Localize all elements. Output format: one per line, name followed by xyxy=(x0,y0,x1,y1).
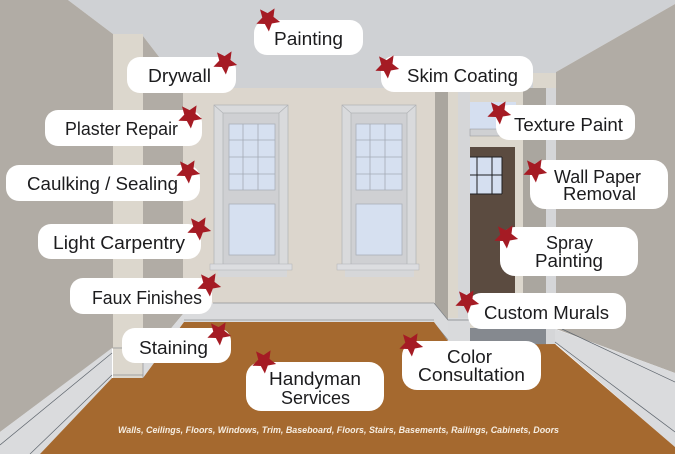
label: Wall Paper Removal: Removal xyxy=(563,183,636,204)
label: Faux Finishes: Faux Finishes xyxy=(92,287,202,308)
label: Handyman Services: Services xyxy=(281,387,350,408)
label: Painting xyxy=(254,8,363,55)
right wall xyxy=(556,4,675,373)
label: Drywall: Drywall xyxy=(148,65,211,86)
label: Light Carpentry: Light Carpentry xyxy=(53,232,186,253)
label: Color Consultation: Color xyxy=(447,346,492,367)
label: Painting: Painting xyxy=(274,28,343,49)
door xyxy=(470,147,515,322)
window left xyxy=(210,105,292,277)
transom window xyxy=(470,102,516,136)
label: Skim Coating: Skim Coating xyxy=(407,65,518,86)
caption: surfaces list: Walls, Ceilings, Floors, Windows, Trim, Baseboard, Floors, Stairs, Basements, Railings, Cabinets, Doors xyxy=(118,425,559,436)
label: Caulking / Sealing: Caulking / Sealing xyxy=(27,173,178,194)
label: Skim Coating xyxy=(374,55,533,92)
label: Staining: Staining xyxy=(139,337,208,358)
back baseboard xyxy=(183,303,434,322)
ceiling xyxy=(68,0,675,88)
right corner and doorway xyxy=(434,73,556,345)
right baseboard xyxy=(555,329,675,447)
label: Wall Paper Removal: Wall Paper xyxy=(554,166,641,187)
label: Plaster Repair: Plaster Repair xyxy=(65,118,178,139)
label: Staining xyxy=(122,322,232,363)
label: Color Consultation xyxy=(398,333,541,390)
label: Wall Paper Removal xyxy=(522,159,668,209)
label: Faux Finishes xyxy=(70,273,222,314)
label: Spray Painting: Spray xyxy=(546,232,594,253)
label: Texture Paint: Texture Paint xyxy=(514,114,623,135)
label: Custom Murals: Custom Murals xyxy=(484,302,609,323)
back wall xyxy=(183,88,435,304)
window right xyxy=(337,105,419,277)
label: Caulking / Sealing xyxy=(6,160,201,201)
left baseboard xyxy=(0,348,112,454)
label: Handyman Services: Handyman xyxy=(269,368,361,389)
label: Spray Painting xyxy=(493,225,638,276)
label: Handyman Services xyxy=(246,350,384,411)
label: Plaster Repair xyxy=(45,105,203,146)
label: Color Consultation: Consultation xyxy=(418,364,525,385)
left column xyxy=(113,34,184,378)
label: Light Carpentry xyxy=(38,217,212,259)
floor xyxy=(40,322,675,454)
label: Spray Painting: Painting xyxy=(535,250,603,271)
label: Drywall xyxy=(127,51,238,93)
label: Texture Paint xyxy=(486,101,635,140)
label: Custom Murals xyxy=(454,290,626,329)
left wall xyxy=(0,0,113,432)
